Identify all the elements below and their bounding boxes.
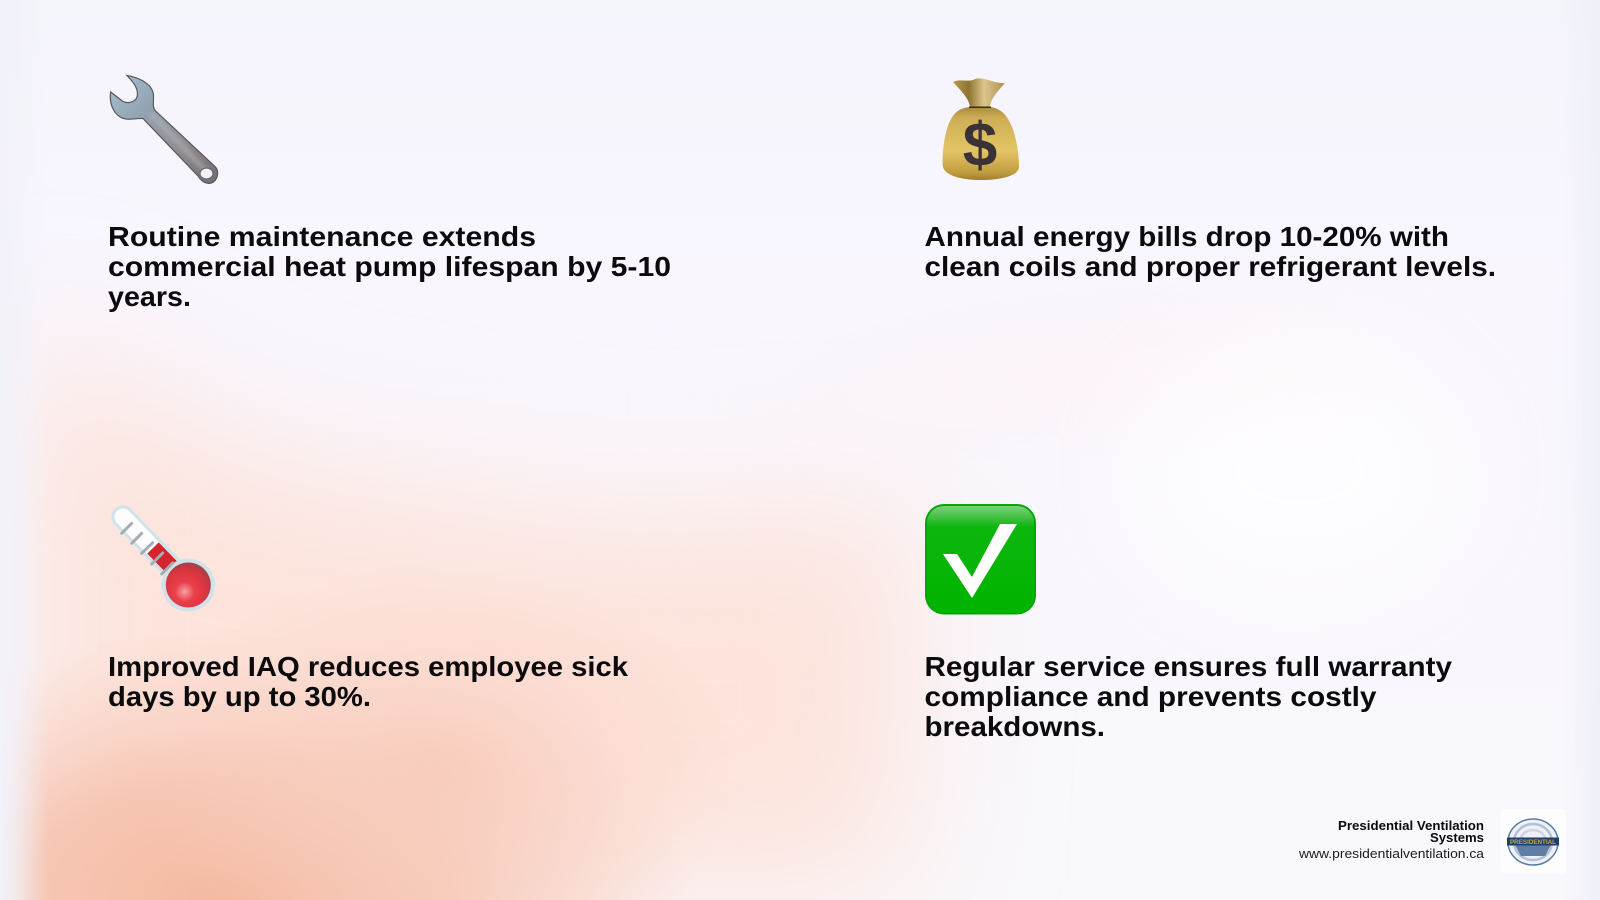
icon: money bag: $ [963, 111, 997, 180]
logo badge [1500, 809, 1566, 874]
panel: indoor air quality [108, 517, 628, 712]
company name: Systems [1430, 831, 1484, 845]
text: indoor air quality: Improved IAQ reduces employee sick [108, 651, 628, 682]
icon: thermometer [122, 517, 215, 612]
icon: wrench [110, 76, 218, 183]
icon: green check mark [925, 504, 1036, 614]
footer: company branding [1298, 809, 1566, 874]
panel: energy bills [924, 78, 1496, 282]
text: maintenance lifespan: commercial heat pump lifespan by 5-10 [108, 251, 671, 282]
website url: www.presidentialventilation.ca [1298, 846, 1485, 861]
text: warranty compliance: breakdowns. [924, 711, 1105, 742]
text: warranty compliance: compliance and prevents costly [924, 681, 1377, 712]
text: warranty compliance: Regular service ensures full warranty [924, 651, 1452, 682]
text: maintenance lifespan: Routine maintenance extends [108, 221, 536, 252]
text: indoor air quality: days by up to 30%. [108, 681, 371, 712]
company name [1338, 819, 1484, 845]
text: energy bills [924, 221, 1496, 282]
text: energy bills: clean coils and proper refrigerant levels. [924, 251, 1496, 282]
panel: maintenance lifespan [108, 76, 671, 312]
text: energy bills: Annual energy bills drop 10-20% with [924, 221, 1449, 252]
logo badge: PRESIDENTIAL [1510, 840, 1556, 846]
panel: warranty compliance [924, 504, 1452, 742]
text: maintenance lifespan [108, 221, 671, 312]
text: warranty compliance [924, 651, 1452, 742]
icon: money bag [943, 78, 1019, 180]
text: indoor air quality [108, 651, 628, 712]
company name: Presidential Ventilation [1338, 819, 1484, 833]
text: maintenance lifespan: years. [108, 281, 191, 312]
